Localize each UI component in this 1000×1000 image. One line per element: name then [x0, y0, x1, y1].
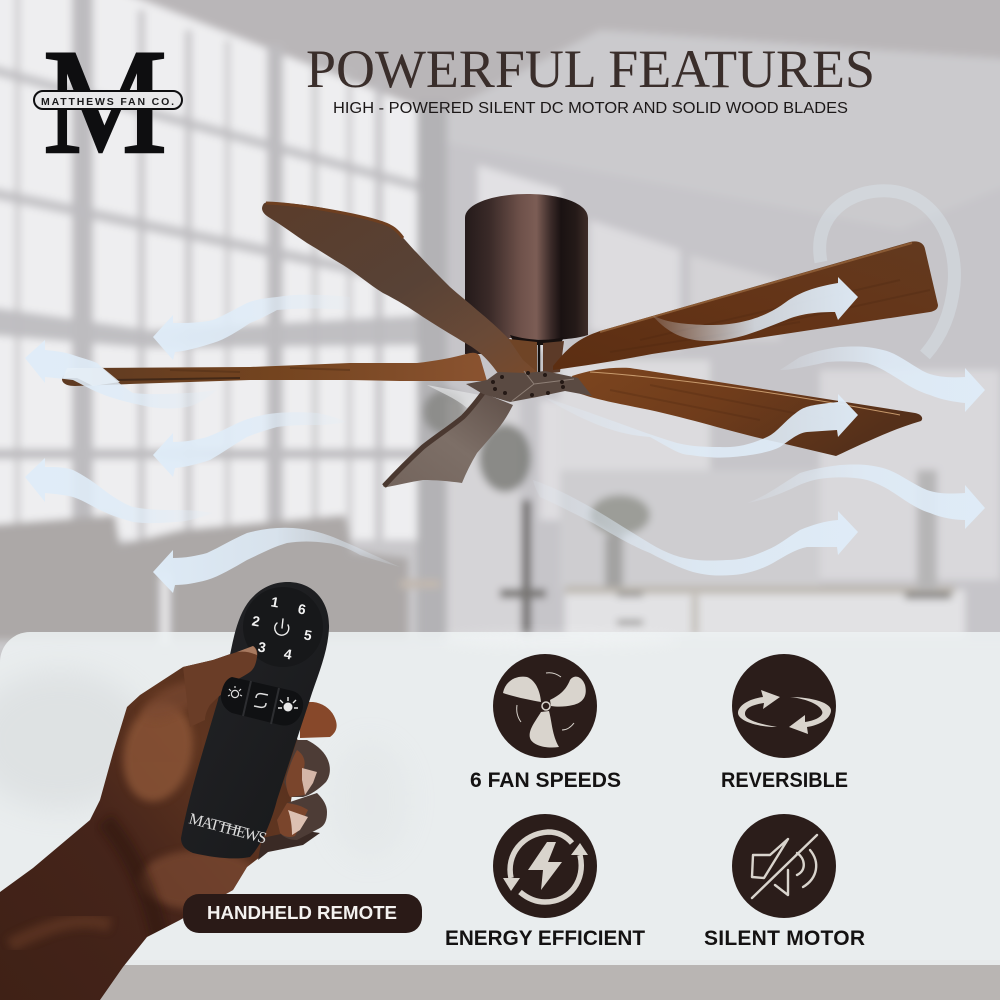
- motor underside: [510, 335, 564, 345]
- icon: reverse: [254, 694, 268, 707]
- console: [565, 590, 965, 638]
- skin shading: [10, 673, 260, 945]
- arrow: right on lower blade: [543, 394, 858, 458]
- feature: energy efficient: [445, 814, 645, 950]
- dial numbers: 4: [283, 645, 293, 663]
- remote dial: [243, 587, 323, 667]
- dial numbers: 2: [251, 612, 261, 630]
- logo: [34, 19, 182, 185]
- icon: light high: [278, 697, 298, 712]
- feature: 6 fan speeds: 6 FAN SPEEDS: [470, 769, 621, 792]
- icon: muted speaker: [752, 835, 817, 898]
- logo pill: [34, 91, 182, 109]
- right wall light patches: [478, 165, 560, 350]
- remote body: [181, 582, 329, 858]
- arrow: right on top blade: [652, 277, 858, 341]
- dial numbers: 5: [303, 626, 313, 644]
- icon: light low: [228, 686, 242, 698]
- sofa: [0, 515, 408, 640]
- finger: middle: [284, 740, 330, 797]
- feature: silent motor: [704, 814, 865, 950]
- blade: top right: [553, 241, 938, 370]
- hand and arm: [0, 646, 300, 1000]
- blade: lower right: [572, 368, 922, 456]
- logo monogram M: M: [43, 19, 167, 185]
- arrow: left middle centre: [153, 412, 347, 477]
- icon: rotation arrows: [738, 690, 831, 734]
- blade shadow under hub: [427, 385, 480, 408]
- air over blade tip: [63, 368, 120, 386]
- feature: reversible: REVERSIBLE: [721, 769, 848, 792]
- pinky shadow: [258, 830, 320, 860]
- fan motor housing: [465, 194, 588, 354]
- swirl air ribbon: [820, 191, 954, 355]
- finger: ring: [277, 793, 327, 840]
- dial numbers: 3: [257, 638, 267, 656]
- subtitle: HIGH - POWERED SILENT DC MOTOR AND SOLID WOOD BLADES: [333, 100, 848, 117]
- feature: reversible: [721, 654, 848, 792]
- finger: index: [300, 702, 337, 738]
- arrow: right lower centre: [533, 480, 858, 576]
- remote brand: MATTHEWS: [187, 810, 269, 848]
- label: handheld remote: [183, 894, 422, 933]
- arrow: left bottom: [153, 528, 400, 593]
- feature: energy efficient: ENERGY EFFICIENT: [445, 927, 645, 950]
- windows: [0, 0, 420, 540]
- label: handheld remote: HANDHELD REMOTE: [207, 903, 397, 923]
- arrow: far right lower: [747, 464, 985, 529]
- feature: 6 fan speeds: [470, 654, 621, 792]
- thumb over remote: [183, 646, 257, 727]
- dial numbers: 1: [270, 593, 280, 611]
- arrow: far left upper: [25, 340, 217, 408]
- thumb nail highlight: [237, 646, 257, 655]
- feature: silent motor: SILENT MOTOR: [704, 927, 865, 950]
- arrow: far left lower: [25, 458, 213, 523]
- dial numbers: [251, 593, 313, 663]
- blade: left: [62, 353, 487, 386]
- glass panel: [0, 632, 1000, 965]
- plants: [423, 390, 467, 434]
- hand holding remote: [0, 582, 337, 1000]
- blade: bottom left: [383, 393, 513, 487]
- dial numbers: 6: [297, 600, 307, 618]
- blade: top left: [262, 202, 537, 382]
- remote button pill: [221, 677, 303, 726]
- icon: power: [275, 619, 289, 635]
- arrow: far right upper: [780, 346, 985, 412]
- icon: fan: [503, 673, 586, 748]
- title: POWERFUL FEATURES: [306, 39, 875, 99]
- icon: energy cycle: [503, 832, 588, 902]
- wood collar above hub: [490, 337, 564, 374]
- arrow: left top centre: [153, 295, 350, 360]
- airflow arrows: [25, 277, 985, 593]
- logo pill: MATTHEWS FAN CO.: [41, 96, 174, 108]
- hub plates: [466, 371, 592, 402]
- ceiling fan: [62, 194, 938, 487]
